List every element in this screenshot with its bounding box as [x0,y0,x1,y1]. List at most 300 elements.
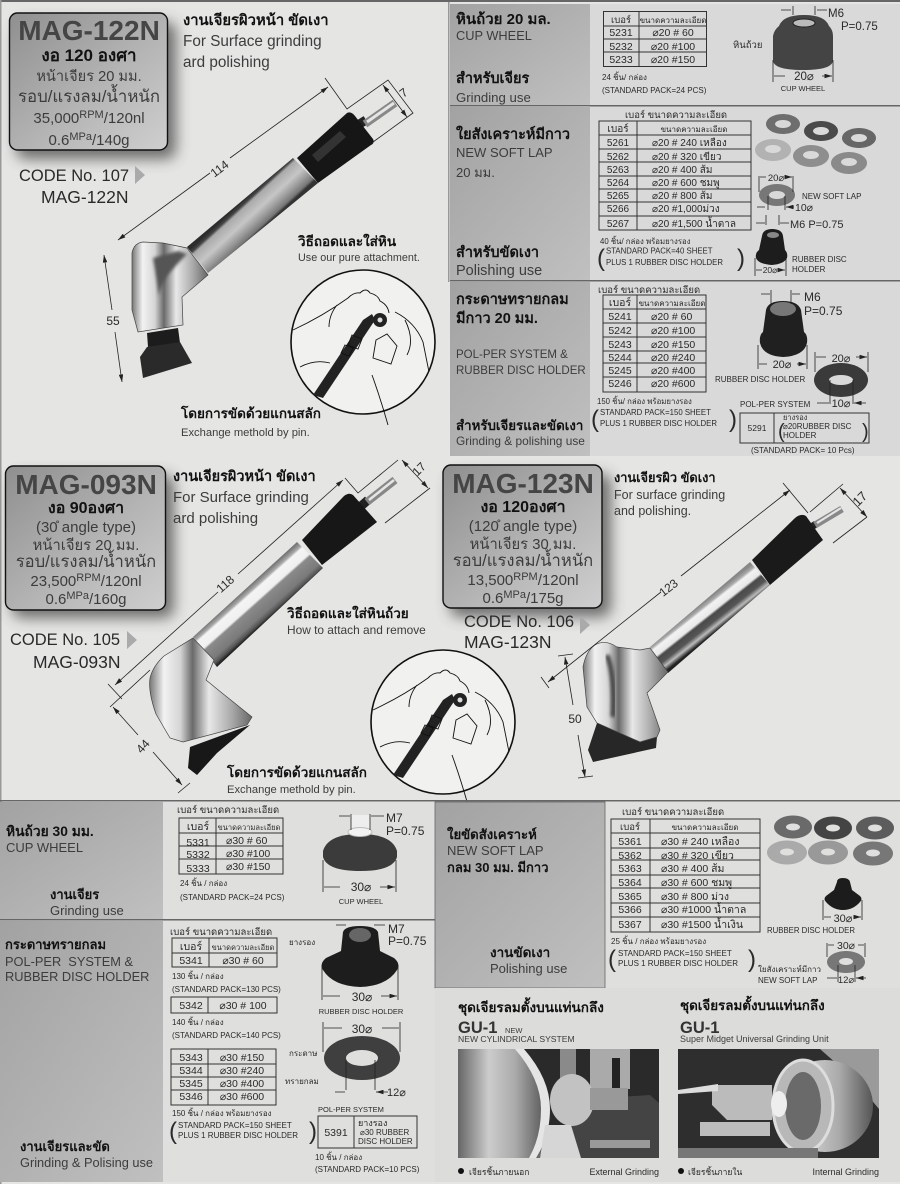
left label panel: pol-per 20: Grinding & polishing use [456,434,585,448]
left label panel: cup wheel 20: สำหรับเจียร [456,70,529,87]
left label panel: cup wheel 30 [0,802,163,919]
MAG-122N dimensions [104,78,413,382]
MAG-123N spec box: รอบ/แรงลม/น้ำหนัก [453,548,593,570]
left label panel: cup wheel 20: หินถ้วย 20 มล. [456,10,551,28]
GU-1 universal unit heading [680,995,829,1044]
table 5261-5267: เบอร์ [607,123,629,135]
MAG-093N dimensions: 44 [133,736,153,756]
icon: pol-per disc 30 [285,1022,406,1114]
table 5343-5346: ⌀30 #150 [220,1052,264,1064]
icon: cup wheel 20: หินถ้วย [733,40,762,51]
pack note 130 pcs: 130 ชิ้น / กล่อง [172,970,224,981]
exchange method note [180,404,321,439]
MAG-093N spec box: (30̊ angle type) [36,519,136,536]
exchange method note [226,763,367,796]
pack note 150 sheet [591,395,737,433]
table 5341: ⌀30 # 60 [222,955,264,967]
table 5331-5333 [177,804,283,875]
panel: new soft lap 20 mm [450,105,900,280]
table 5261-5267: เบอร์ ขนาดความละเอียด [625,109,727,121]
MAG-122N dimensions: 114 [208,157,232,180]
table 5241-5246: เบอร์ ขนาดความละเอียด [598,284,700,296]
table 5331-5333: เบอร์ [187,820,209,833]
GU-1 new cylindrical heading: NEW CYLINDRICAL SYSTEM [458,1034,575,1044]
table 5361-5367: ⌀30 #1000 น้ำตาล [661,902,746,916]
table 5261-5267 [599,109,751,230]
left label panel: soft lap 20: สำหรับขัดเงา [456,244,539,261]
table 5261-5267: 5264 [607,178,630,189]
MAG-123N description: งานเจียรผิว ขัดเงา [614,470,716,485]
table 5241-5246: ⌀20 #400 [651,365,695,377]
icon: pol-per disc 30: POL-PER SYSTEM [318,1105,384,1114]
pack note 150 sheet: PLUS 1 RUBBER DISC HOLDER [178,1131,298,1140]
MAG-122N spec box [10,13,176,159]
icon: new soft lap 20 [757,173,861,214]
icon: rubber disc holder 20 large: P=0.75 [804,304,843,318]
table 5361-5367: ⌀30 #1500 น้ำเงิน [661,917,743,931]
icon: cup wheel 30 [323,811,425,906]
table 5241-5246: 5241 [608,311,632,323]
table 5341 [170,926,277,967]
MAG-122N description: ard polishing [183,54,270,71]
caption: internal grinding [678,1166,879,1177]
icon: cup wheel 20 [733,6,878,93]
pack note 150 sheet: 150 ชิ้น / กล่อง พร้อมยางรอง [172,1107,272,1118]
table 5341: 5341 [179,955,203,967]
table 5331-5333: ⌀30 #150 [226,861,270,873]
panel: cup wheel 30 mm [0,800,900,919]
GU-1 universal unit heading: Super Midget Universal Grinding Unit [680,1034,829,1044]
left label panel: cup wheel 30: CUP WHEEL [6,840,83,855]
table 5231-5233: ⌀20 #100 [651,41,695,53]
icon: cup wheel 30: CUP WHEEL [339,897,383,906]
icon: rubber disc holder 20: RUBBER DISC [792,255,847,264]
table 5331-5333: 5333 [186,863,210,875]
icon: pol-per disc 30: ทรายกลม [285,1077,319,1086]
left label panel: soft lap 20: ใยสังเคราะห์มีกาว [456,125,570,143]
table 5231-5233: ขนาดความละเอียด [640,16,706,25]
MAG-122N description: For Surface grinding [183,33,322,50]
caption: external grinding: เจียรชิ้นภายนอก [469,1166,529,1177]
pack note 150 sheet: ( [169,1118,177,1145]
table 5291: ⌀20RUBBER DISC [783,422,852,431]
table 5331-5333: ⌀30 # 60 [226,835,268,847]
pack note 24 pcs [180,877,285,902]
icon: cup wheel 30: 30⌀ [351,880,371,894]
icon: cup wheel 20: M6 [828,8,844,20]
MAG-123N spec box: หน้าเจียร 30 มม. [470,536,576,553]
table 5241-5246: 5245 [608,365,632,377]
table 5241-5246: ขนาดความละเอียด [639,299,705,308]
icon: rubber disc holder 20: M6 P=0.75 [790,219,844,231]
icon: rubber disc holder 20 large [715,290,843,384]
table 5241-5246: ⌀20 #240 [651,352,695,364]
left label panel: cup wheel 20: CUP WHEEL [456,28,532,43]
table 5241-5246 [598,284,706,392]
table 5261-5267: 5263 [607,165,630,176]
MAG-123N spec box: 13,500 [467,572,513,589]
icon: cup wheel 20: 20⌀ [794,71,814,83]
left label panel: cup wheel 30: หินถ้วย 30 มม. [6,824,94,839]
MAG-123N dimensions [541,483,870,778]
icon: rubber disc holder 30: RUBBER DISC HOLDER [319,1007,404,1016]
pack note 150 sheet: ( [608,946,616,973]
left label panel: soft lap 30: ใยขัดสังเคราะห์ [447,826,537,842]
table 5291 [740,413,869,455]
icon: cup wheel 20: P=0.75 [841,21,878,33]
MAG-123N code label: MAG-123N [464,632,552,652]
left label panel: soft lap 30: กลม 30 มม. มีกาว [447,860,548,875]
MAG-093N code label [10,631,137,672]
icon: rubber disc holder 30: M7 [388,922,405,936]
left label panel: soft lap 20: 20 มม. [456,165,495,180]
table 5331-5333: เบอร์ ขนาดความละเอียด [177,804,279,816]
MAG-122N spec box: MAG-122N [18,15,160,46]
table 5261-5267: ⌀20 # 400 ส้ม [652,164,712,176]
panel: pol-per system 20 mm [450,280,900,456]
MAG-093N dimensions: 17 [409,459,429,479]
table 5241-5246: 5246 [608,378,632,390]
pack note 40 sheet: STANDARD PACK=40 SHEET [606,246,713,256]
how-to note: how to attach and remove [287,605,426,637]
pack note 150 sheet: PLUS 1 RUBBER DISC HOLDER [600,419,717,428]
how-to note: how to attach and remove: How to attach and remove [287,623,426,637]
table 5261-5267: 5261 [607,138,630,149]
table 5341: เบอร์ ขนาดความละเอียด [170,926,272,938]
table 5343-5346: 5343 [179,1052,203,1064]
table 5291: HOLDER [783,431,817,440]
MAG-093N spec box: MAG-093N [15,469,157,500]
exchange method note: Exchange methold by pin. [181,427,310,439]
left label panel: soft lap 30: Polishing use [490,961,567,976]
table 5261-5267: 5267 [607,219,630,230]
table 5261-5267: 5262 [607,152,630,163]
left label panel: soft lap 30 [435,802,605,988]
MAG-093N spec box: หน้าเจียร 20 มม. [33,537,139,554]
MAG-122N spec box: งอ 120 องศา [41,46,137,65]
MAG-093N spec box: RPM [76,572,101,584]
caption: internal grinding: เจียรชิ้นภายใน [688,1166,743,1177]
photo: internal grinding [678,1049,879,1158]
pack note 150 sheet: ) [309,1118,317,1145]
left label panel: pol-per 20 [450,282,590,456]
icon: rubber disc holder 30: ยางรอง [289,938,315,947]
panel: pol-per system 30 mm [0,919,435,1182]
MAG-123N code label [464,613,590,652]
table 5391: ยางรอง [358,1118,387,1128]
table 5361-5367: 5364 [618,877,642,889]
table 5231-5233: ⌀20 #150 [651,54,695,66]
table 5291: 5291 [748,423,767,433]
table 5261-5267: ⌀20 #1,000ม่วง [652,204,720,215]
photo: external grinding [458,1049,659,1158]
MAG-122N description [183,12,329,71]
pack note 40 sheet: 40 ชิ้น/ กล่อง พร้อมยางรอง [600,235,691,246]
MAG-123N spec box: /120nl [538,572,579,589]
icon: rubber disc holder 30 small: RUBBER DISC HOLDER [767,926,855,935]
table 5391: (STANDARD PACK=10 PCS) [315,1165,420,1174]
icon: rubber disc holder 20: HOLDER [792,265,826,274]
table 5331-5333: ขนาดความละเอียด [218,823,280,832]
table 5361-5367: 5363 [618,863,642,875]
table 5361-5367: 5367 [618,919,642,931]
MAG-093N code label: CODE No. 105 [10,631,120,649]
table 5361-5367: 5361 [618,836,642,848]
icon: new soft lap 20: 10⌀ [795,202,813,214]
table 5342: 5342 [179,1000,203,1012]
table 5231-5233: 5232 [609,41,633,53]
MAG-122N tool photo [132,103,395,378]
icon: rubber disc holder 30: 30⌀ [352,990,372,1004]
pack note 40 sheet: ( [597,245,605,272]
pack note 24 pcs: (STANDARD PACK=24 PCS) [180,893,285,902]
icon: rubber disc holder 20 [755,215,847,276]
icon: new soft lap 30: 12⌀ [838,975,854,986]
left label panel: pol-per 30: POL-PER SYSTEM & [5,954,133,969]
left label panel: pol-per 30: กระดาษทรายกลม [5,937,106,952]
MAG-093N spec box: 0.6 [45,591,66,608]
pack note 140 pcs: (STANDARD PACK=140 PCS) [172,1031,281,1040]
pack note 150 sheet: STANDARD PACK=150 SHEET [618,949,732,958]
MAG-122N spec box: 0.6 [48,132,69,149]
icon: pol-per disc 20: 10⌀ [832,398,851,410]
table 5241-5246: 5242 [608,325,632,337]
MAG-123N spec box: /175g [526,590,564,607]
MAG-123N dimensions: 50 [568,712,582,726]
table 5241-5246: 5244 [608,352,632,364]
caption: external grinding: External Grinding [589,1167,659,1177]
left label panel: pol-per 20: มีกาว 20 มม. [456,310,538,327]
table 5343-5346: 5346 [179,1091,203,1103]
table 5343-5346 [171,1049,276,1105]
GU-1 new cylindrical heading [458,997,604,1044]
pack note 40 sheet [597,235,745,272]
table 5361-5367: ⌀30 # 320 เขียว [661,849,734,862]
table 5361-5367: ⌀30 # 600 ชมพู [661,877,732,889]
icon: cup wheel 30: P=0.75 [386,824,425,838]
table 5343-5346: ⌀30 #240 [220,1065,264,1077]
panel: MAG-122N product [10,2,450,439]
pack note 24 pcs: 24 ชิ้น / กล่อง [180,877,227,888]
table 5231-5233: เบอร์ [611,14,631,26]
table 5231-5233 [603,11,707,67]
pack note 24 pcs: 24 ชิ้น/ กล่อง [602,71,647,82]
icon: new soft lap 30: NEW SOFT LAP [758,976,817,985]
icon: pol-per disc 20: 20⌀ [832,353,851,365]
icon: hand changing wheel, MAG-122N [291,270,435,425]
icon: new soft lap 20: NEW SOFT LAP [802,192,861,201]
MAG-123N dimensions: 17 [849,488,870,509]
table 5261-5267: 5265 [607,191,630,202]
MAG-122N spec box: 35,000 [33,110,79,127]
MAG-123N spec box: งอ 120องศา [480,499,566,516]
GU-1 universal unit heading: GU-1 [680,1019,719,1037]
MAG-093N spec box: 23,500 [30,573,76,590]
GU-1 universal unit heading: ชุดเจียรลมตั้งบนแท่นกลึง [680,995,825,1014]
table 5361-5367: เบอร์ [620,821,640,833]
MAG-122N spec box: รอบ/แรงลม/น้ำหนัก [18,84,160,106]
pack note 150 sheet [608,935,756,973]
pack note 150 sheet: ) [729,406,737,433]
left label panel: soft lap 20 [450,106,590,280]
MAG-093N dimensions: 118 [214,572,237,596]
MAG-122N spec box: MPa [69,131,93,143]
icon: hand changing wheel, MAG-093N [371,650,515,805]
how-to note: use our pure attachment [298,233,420,264]
table 5331-5333: ⌀30 #100 [226,848,270,860]
panel: MAG-093N product [6,459,515,805]
icon: six soft lap discs [755,114,876,174]
icon: pol-per disc 20 [740,352,868,410]
table 5291: ยางรอง [783,413,808,422]
left label panel: pol-per 30: งานเจียรและขัด [20,1139,110,1154]
left label panel: soft lap 30: งานขัดเงา [490,945,550,960]
table 5361-5367: เบอร์ ขนาดความละเอียด [622,806,724,818]
MAG-093N spec box: รอบ/แรงลม/น้ำหนัก [16,549,156,571]
table 5361-5367: ⌀30 # 800 ม่วง [661,891,729,903]
left label panel: pol-per 20: สำหรับเจียรและขัดเงา [456,418,583,433]
pack note 140 pcs [172,1016,281,1040]
MAG-122N spec box: RPM [79,109,104,121]
MAG-122N spec box: หน้าเจียร 20 มม. [36,68,142,85]
pack note 150 sheet: 150 ชิ้น/ กล่อง พร้อมยางรอง [597,395,692,406]
icon: pol-per disc 30: 12⌀ [387,1087,406,1099]
icon: pol-per disc 30: 30⌀ [352,1022,372,1036]
table 5261-5267: ขนาดความละเอียด [661,125,727,134]
MAG-122N code label: CODE No. 107 [19,167,129,185]
pack note 150 sheet: PLUS 1 RUBBER DISC HOLDER [618,959,738,968]
pack note 130 pcs: (STANDARD PACK=130 PCS) [172,985,281,994]
table 5241-5246: ⌀20 #150 [651,339,695,351]
left label panel: pol-per 20: POL-PER SYSTEM & [456,349,568,361]
left label panel: soft lap 20: NEW SOFT LAP [456,145,553,160]
MAG-123N spec box: MPa [503,589,527,601]
icon: cup wheel 20: CUP WHEEL [781,84,825,93]
MAG-122N description: งานเจียรผิวหน้า ขัดเงา [183,12,329,29]
MAG-123N spec box: 0.6 [482,590,503,607]
table 5261-5267: ⌀20 #1,500 น้ำตาล [652,216,736,230]
table 5241-5246: เบอร์ [609,296,631,309]
table 5241-5246: ⌀20 #100 [651,325,695,337]
icon: rubber disc holder 30 small [767,878,862,935]
table 5361-5367: 5365 [618,891,642,903]
MAG-093N description: For Surface grinding [173,489,309,506]
MAG-123N description: and polishing. [614,504,691,518]
MAG-093N spec box [6,466,174,618]
pack note 150 sheet [169,1107,317,1145]
GU-1 new cylindrical heading: GU-1 [458,1019,497,1037]
panel: MAG-123N product [443,465,870,778]
MAG-122N dimensions: 55 [106,314,120,328]
table 5241-5246: ⌀20 #600 [651,378,695,390]
MAG-093N description: งานเจียรผิวหน้า ขัดเงา [173,468,316,485]
icon: cup wheel 30: M7 [386,811,403,825]
table 5231-5233: ⌀20 # 60 [652,27,694,39]
pack note 40 sheet: PLUS 1 RUBBER DISC HOLDER [606,258,723,267]
MAG-122N dimensions: 7 [397,85,411,100]
icon: rubber disc holder 20 large: M6 [804,290,821,304]
MAG-093N spec box: งอ 90องศา [48,500,124,517]
table 5341: เบอร์ [180,940,202,953]
left label panel: cup wheel 20 [450,4,590,105]
table 5343-5346: 5344 [179,1065,203,1077]
MAG-123N spec box: (120̊ angle type) [469,518,577,535]
table 5391 [315,1116,420,1174]
pack note 150 sheet: STANDARD PACK=150 SHEET [178,1121,292,1130]
left label panel: soft lap 20: Polishing use [456,263,542,279]
GU-1 new cylindrical heading: ชุดเจียรลมตั้งบนแท่นกลึง [458,997,604,1016]
MAG-093N description: ard polishing [173,510,258,527]
left label panel: pol-per 20: กระดาษทรายกลม [456,292,569,308]
table 5342: ⌀30 # 100 [219,1000,267,1012]
table 5361-5367: ⌀30 # 240 เหลือง [661,835,740,848]
table 5361-5367 [611,806,760,932]
table 5361-5367: ขนาดความละเอียด [672,823,738,832]
MAG-123N spec box [443,465,611,617]
icon: new soft lap 30: ใยสังเคราะห์มีกาว [758,964,821,974]
table 5261-5267: ⌀20 # 800 ส้ม [652,190,712,202]
left label panel: soft lap 30: NEW SOFT LAP [447,843,544,858]
MAG-123N tool photo [583,508,842,762]
table 5391: ⌀30 RUBBER [360,1128,410,1137]
MAG-123N dimensions: 123 [656,576,681,600]
pack note 24 pcs: (STANDARD PACK=24 PCS) [602,86,707,95]
MAG-123N spec box: MAG-123N [452,468,594,499]
table 5331-5333: 5331 [186,837,210,849]
how-to note: how to attach and remove: วิธีถอดและใส่หินถ้วย [287,605,409,621]
exchange method note: Exchange methold by pin. [227,784,356,796]
table 5342 [171,997,277,1013]
table 5343-5346: ⌀30 #600 [220,1091,264,1103]
pack note 150 sheet: STANDARD PACK=150 SHEET [600,408,711,417]
icon: rubber disc holder 20 large: 20⌀ [773,359,792,371]
icon: rubber disc holder 30 [289,922,427,1016]
icon: rubber disc holder 30: P=0.75 [388,934,427,948]
MAG-093N dimensions [108,459,430,793]
icon: six soft lap discs 30 [767,816,894,866]
exchange method note: โดยการขัดด้วยแกนสลัก [226,763,367,780]
table 5291: ) [862,421,869,443]
icon: new soft lap 20: 20⌀ [768,173,784,184]
pack note 130 pcs [172,970,281,994]
table 5341: ขนาดความละเอียด [212,943,274,952]
panel: new soft lap 30 mm [435,802,900,988]
icon: rubber disc holder 30 small: 30⌀ [834,913,853,925]
MAG-122N spec box: /120nl [104,110,145,127]
GU-1 new cylindrical heading: NEW [505,1026,523,1035]
table 5241-5246: ⌀20 # 60 [651,311,693,323]
table 5231-5233: 5231 [609,27,633,39]
pack note 140 pcs: 140 ชิ้น / กล่อง [172,1016,224,1027]
how-to note: use our pure attachment: Use our pure attachment. [298,252,420,264]
MAG-123N code label: CODE No. 106 [464,613,574,631]
MAG-123N description: For surface grinding [614,488,725,502]
pack note 150 sheet: ) [748,946,756,973]
table 5391: 5391 [324,1127,348,1139]
table 5343-5346: 5345 [179,1078,203,1090]
MAG-093N description [173,468,316,527]
table 5291: (STANDARD PACK= 10 Pcs) [751,446,855,455]
MAG-093N spec box: MPa [66,590,90,602]
pack note 40 sheet: ) [737,245,745,272]
caption: internal grinding: Internal Grinding [812,1167,879,1177]
table 5361-5367: 5362 [618,850,642,862]
MAG-122N code label [19,166,145,207]
MAG-093N spec box: /160g [89,591,127,608]
pack note 150 sheet: 25 ชิ้น / กล่อง พร้อมยางรอง [611,935,706,946]
table 5291: ( [778,421,785,443]
how-to note: use our pure attachment: วิธีถอดและใส่หิน [298,233,397,249]
